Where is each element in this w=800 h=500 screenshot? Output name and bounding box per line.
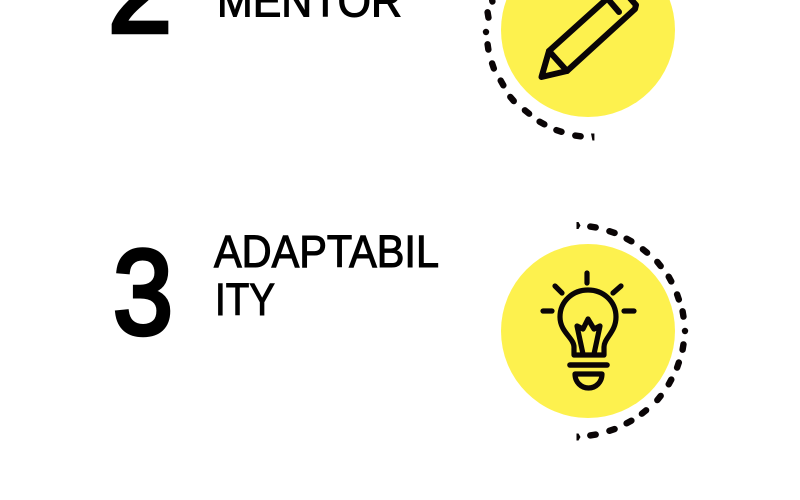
icon: pencil in yellow circle [501,0,675,117]
heading: adaptability: ITY [215,274,275,325]
icon: light bulb in yellow circle [501,244,675,418]
item 2: mentor [108,0,675,140]
heading: adaptability: ADAPTABIL [214,226,439,277]
heading: adaptability [214,226,439,325]
number 3: 3 [113,224,173,360]
dotted arc around bulb circle [576,222,688,440]
item 3: adaptability [113,222,688,440]
dotted arc around pencil circle [483,0,594,140]
